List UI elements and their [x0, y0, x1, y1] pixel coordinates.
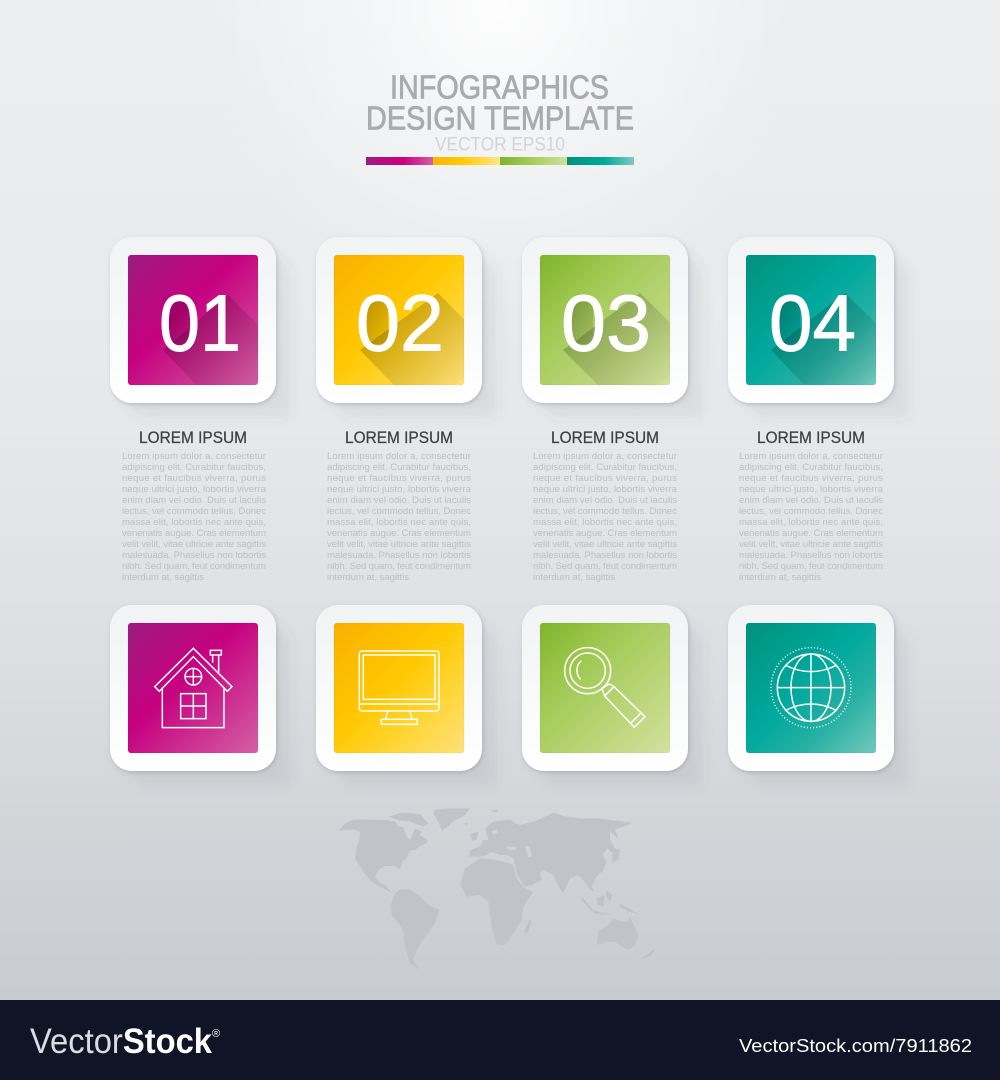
greenland	[433, 808, 470, 831]
title line 1: INFOGRAPHICS	[390, 68, 609, 106]
footer logo: VectorStock	[30, 1022, 212, 1061]
column 2 paragraph	[327, 451, 472, 583]
column 1 paragraph: nibh. Sed quam, feut condimentum	[122, 561, 266, 572]
icon card: globe	[728, 605, 908, 785]
column 1 paragraph: enim diam vel odio. Duis ut iaculis	[122, 495, 266, 506]
column 2 paragraph: malesuada. Phasellus non lobortis	[327, 550, 471, 561]
column 1 paragraph: Lorem ipsum dolor a, consectetur	[122, 451, 267, 462]
icon: house	[155, 648, 232, 728]
column 1 paragraph: interdum at, sagittis	[122, 572, 204, 583]
column 3 paragraph: nibh. Sed quam, feut condimentum	[533, 561, 677, 572]
column 4 paragraph: nibh. Sed quam, feut condimentum	[739, 561, 883, 572]
column 2 paragraph: enim diam vel odio. Duis ut iaculis	[327, 495, 471, 506]
footer url: VectorStock.com/7911862	[739, 1035, 972, 1056]
column 3 paragraph: venenatis augue. Cras elementum	[533, 528, 677, 539]
column 2 paragraph: venenatis augue. Cras elementum	[327, 528, 471, 539]
column 4 paragraph: venenatis augue. Cras elementum	[739, 528, 883, 539]
column 4 paragraph: malesuada. Phasellus non lobortis	[739, 550, 883, 561]
column 3 paragraph: malesuada. Phasellus non lobortis	[533, 550, 677, 561]
column 1 paragraph: massa elit, lobortis nec ante quis,	[122, 517, 266, 528]
islands	[463, 810, 656, 959]
column 2 paragraph: Lorem ipsum dolor a, consectetur	[327, 451, 472, 462]
number 03: 03	[561, 278, 651, 368]
text column 4	[739, 429, 884, 583]
column 1 paragraph: malesuada. Phasellus non lobortis	[122, 550, 266, 561]
column 1 paragraph: lectus, vel commodo tellus. Donec	[122, 506, 266, 517]
column 4 paragraph: interdum at, sagittis	[739, 572, 821, 583]
column 3 paragraph: Lorem ipsum dolor a, consectetur	[533, 451, 678, 462]
number card 01	[110, 237, 290, 417]
column 1 paragraph: neque et faucibus viverra, purus	[122, 473, 266, 484]
column 3 paragraph: enim diam vel odio. Duis ut iaculis	[533, 495, 677, 506]
column 3 paragraph: lectus, vel commodo tellus. Donec	[533, 506, 677, 517]
column 2 heading: LOREM IPSUM	[345, 429, 453, 447]
madagascar	[524, 918, 532, 934]
icon card: house	[110, 605, 290, 785]
column 2 paragraph: nibh. Sed quam, feut condimentum	[327, 561, 471, 572]
column 3 paragraph	[533, 451, 678, 583]
icon card: monitor	[316, 605, 496, 785]
north america	[338, 819, 428, 893]
icon: monitor	[359, 651, 439, 724]
number card 04	[728, 237, 908, 417]
number 02: 02	[356, 278, 444, 368]
column 3 heading: LOREM IPSUM	[551, 429, 659, 447]
column 3 paragraph: massa elit, lobortis nec ante quis,	[533, 517, 677, 528]
column 1 heading: LOREM IPSUM	[139, 429, 247, 447]
column 4 paragraph	[739, 451, 884, 583]
column 1 paragraph: neque ultrici justo, lobortis viverra	[122, 484, 267, 495]
title block	[366, 68, 634, 165]
title line 2: DESIGN TEMPLATE	[366, 100, 634, 136]
number 04: 04	[769, 278, 856, 368]
icon card: magnifier	[522, 605, 702, 785]
icon: magnifying glass	[565, 648, 645, 727]
text column 2	[327, 429, 472, 583]
world map	[338, 808, 656, 970]
south america	[391, 889, 439, 970]
column 2 paragraph: velit velit, vitae ultricie ante sagittis	[327, 539, 471, 550]
colour bar	[366, 157, 634, 165]
column 4 paragraph: neque ultrici justo, lobortis viverra	[739, 484, 884, 495]
column 2 paragraph: neque ultrici justo, lobortis viverra	[327, 484, 472, 495]
column 2 paragraph: neque et faucibus viverra, purus	[327, 473, 471, 484]
icon: globe	[771, 648, 851, 728]
column 1 paragraph: adipiscing elit. Curabitur faucibus,	[122, 462, 266, 473]
africa	[460, 858, 533, 945]
column 3 paragraph: adipiscing elit. Curabitur faucibus,	[533, 462, 677, 473]
column 3 paragraph: neque ultrici justo, lobortis viverra	[533, 484, 678, 495]
number card 03	[522, 237, 702, 417]
column 4 paragraph: massa elit, lobortis nec ante quis,	[739, 517, 883, 528]
eurasia	[469, 813, 633, 893]
column 4 paragraph: adipiscing elit. Curabitur faucibus,	[739, 462, 883, 473]
column 2 paragraph: adipiscing elit. Curabitur faucibus,	[327, 462, 471, 473]
australia	[597, 917, 638, 950]
text column 3	[533, 429, 678, 583]
column 4 heading: LOREM IPSUM	[757, 429, 865, 447]
column 2 paragraph: interdum at, sagittis	[327, 572, 409, 583]
column 4 paragraph: neque et faucibus viverra, purus	[739, 473, 883, 484]
column 3 paragraph: neque et faucibus viverra, purus	[533, 473, 677, 484]
column 1 paragraph	[122, 451, 267, 583]
column 3 paragraph: interdum at, sagittis	[533, 572, 615, 583]
number 01: 01	[159, 278, 241, 368]
column 4 paragraph: Lorem ipsum dolor a, consectetur	[739, 451, 884, 462]
column 4 paragraph: lectus, vel commodo tellus. Donec	[739, 506, 883, 517]
column 3 paragraph: velit velit, vitae ultricie ante sagittis	[533, 539, 677, 550]
column 4 paragraph: velit velit, vitae ultricie ante sagittis	[739, 539, 883, 550]
column 4 paragraph: enim diam vel odio. Duis ut iaculis	[739, 495, 883, 506]
text column 1	[122, 429, 267, 583]
registered mark: ®	[212, 1028, 220, 1040]
column 2 paragraph: lectus, vel commodo tellus. Donec	[327, 506, 471, 517]
column 1 paragraph: velit velit, vitae ultricie ante sagittis	[122, 539, 266, 550]
footer bar	[0, 1000, 1000, 1080]
column 1 paragraph: venenatis augue. Cras elementum	[122, 528, 266, 539]
number card 02	[316, 237, 496, 417]
column 2 paragraph: massa elit, lobortis nec ante quis,	[327, 517, 471, 528]
arctic islands	[388, 813, 428, 827]
subtitle: VECTOR EPS10	[435, 134, 565, 156]
